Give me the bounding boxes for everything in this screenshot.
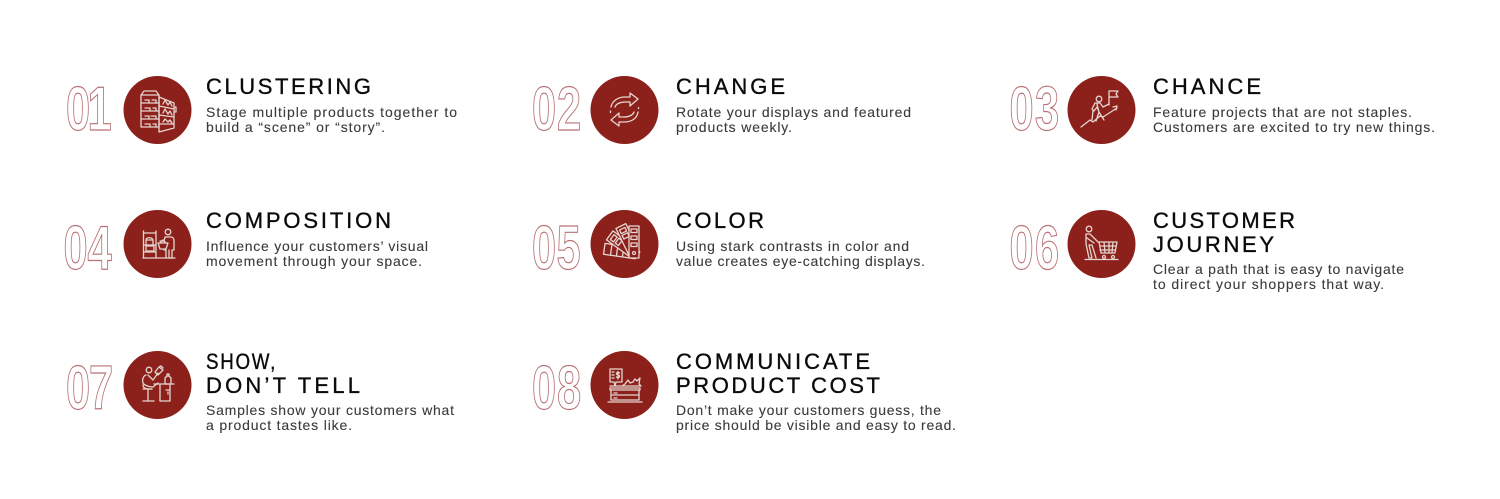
item 01: clustering <box>66 74 457 144</box>
item 04: composition <box>64 208 428 283</box>
heading: CHANGE <box>676 74 785 99</box>
description <box>676 238 925 269</box>
icon: colour swatch fan <box>590 210 658 278</box>
icon: shelves with open door <box>124 76 192 144</box>
item 06: customer journey <box>1010 208 1404 292</box>
description: price should be visible and easy to read. <box>676 417 956 433</box>
heading: SHOW, <box>206 349 277 374</box>
description <box>206 238 428 269</box>
heading <box>206 349 360 398</box>
number 06: 06 <box>1010 215 1059 283</box>
icon: climber with flag <box>1068 76 1136 144</box>
description: build a “scene” or “story”. <box>206 119 385 135</box>
description: Using stark contrasts in color and <box>676 238 909 254</box>
description: products weekly. <box>676 119 792 135</box>
heading: COMMUNICATE <box>676 349 870 374</box>
number 01: 01 <box>66 76 112 144</box>
heading <box>676 349 880 398</box>
item 03: chance <box>1010 74 1435 144</box>
item 02: change <box>532 74 911 144</box>
description: Samples show your customers what <box>206 402 454 418</box>
description: Influence your customers’ visual <box>206 238 428 254</box>
number 07: 07 <box>66 355 113 423</box>
heading: CUSTOMER <box>1153 208 1295 233</box>
number 02: 02 <box>532 76 581 144</box>
heading: CLUSTERING <box>206 74 371 99</box>
number 04: 04 <box>64 215 112 283</box>
description: Feature projects that are not staples. <box>1153 104 1412 120</box>
heading: CHANCE <box>1153 74 1261 99</box>
description: Clear a path that is easy to navigate <box>1153 261 1404 277</box>
heading: PRODUCT COST <box>676 373 880 398</box>
description: a product tastes like. <box>206 417 352 433</box>
description: Customers are excited to try new things. <box>1153 119 1435 135</box>
heading: COMPOSITION <box>206 208 391 233</box>
description: to direct your shoppers that way. <box>1153 276 1384 292</box>
icon: rotating arrows <box>590 76 658 144</box>
description <box>676 402 956 433</box>
description <box>676 104 911 135</box>
description: Stage multiple products together to <box>206 104 457 120</box>
item 08: communicate product cost <box>532 349 956 433</box>
icon: person sampling at counter <box>124 351 192 419</box>
heading <box>1153 208 1295 257</box>
number 03: 03 <box>1010 76 1059 144</box>
description <box>1153 261 1404 292</box>
item 05: color <box>532 208 925 283</box>
heading: JOURNEY <box>1153 232 1274 257</box>
description <box>206 402 454 433</box>
number 05: 05 <box>532 215 581 283</box>
heading: DON’T TELL <box>206 373 360 398</box>
icon: shopper at shelf <box>124 210 192 278</box>
heading: COLOR <box>676 208 764 233</box>
icon: shopper with cart <box>1068 210 1136 278</box>
description: Rotate your displays and featured <box>676 104 911 120</box>
description <box>206 104 457 135</box>
icon: price sign on produce crate <box>590 351 658 419</box>
description: Don’t make your customers guess, the <box>676 402 941 418</box>
number 08: 08 <box>532 355 581 423</box>
item 07: show, don't tell <box>66 349 454 433</box>
description <box>1153 104 1435 135</box>
description: value creates eye-catching displays. <box>676 253 925 269</box>
description: movement through your space. <box>206 253 422 269</box>
